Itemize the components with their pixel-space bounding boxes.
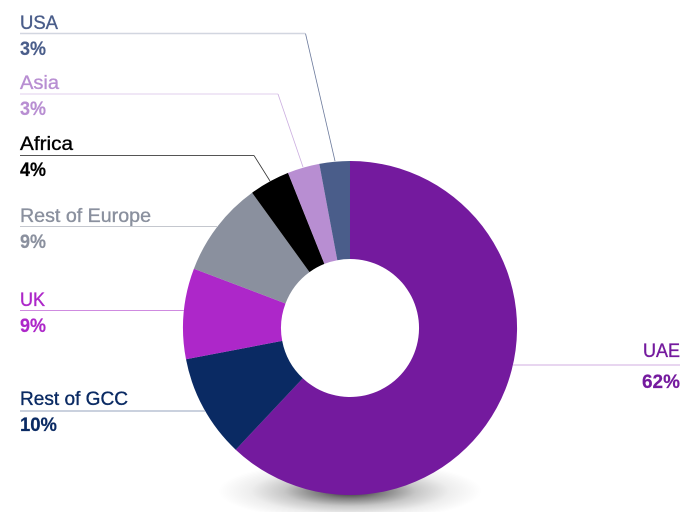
slice: Rest of GCC 10% [186, 341, 303, 450]
label: Rest of GCC [20, 389, 205, 436]
label: Rest of Europe: 9% [20, 232, 46, 253]
label: USA: 3% [20, 39, 46, 60]
slice: Asia 3% [288, 164, 337, 264]
label: Rest of GCC: 10% [20, 415, 57, 436]
label: UAE: 62% [642, 372, 680, 393]
chart shadow [234, 472, 466, 512]
label: UK: UK [20, 290, 45, 311]
slice: UAE 62% [236, 161, 517, 495]
slice: Africa 4% [252, 173, 324, 272]
slice: USA 3% [319, 161, 350, 260]
label: USA: USA [20, 13, 58, 34]
label: Rest of Europe [20, 206, 218, 253]
label: UK: 9% [20, 316, 46, 337]
label: Africa: Africa [20, 134, 73, 155]
label: Asia: 3% [20, 99, 46, 120]
slice: Rest of Europe 9% [194, 193, 310, 304]
label: UAE [513, 341, 680, 393]
label: Rest of GCC: Rest of GCC [20, 389, 128, 410]
label: Africa: 4% [20, 160, 46, 181]
label: Africa [20, 134, 270, 181]
label: UK [20, 290, 184, 337]
label: UAE: UAE [643, 341, 680, 362]
slice: UK 9% [183, 269, 286, 359]
label: USA [20, 13, 335, 161]
label: Asia: Asia [20, 73, 59, 94]
donut chart [183, 161, 517, 495]
label: Asia [20, 73, 303, 167]
label: Rest of Europe: Rest of Europe [20, 206, 151, 227]
